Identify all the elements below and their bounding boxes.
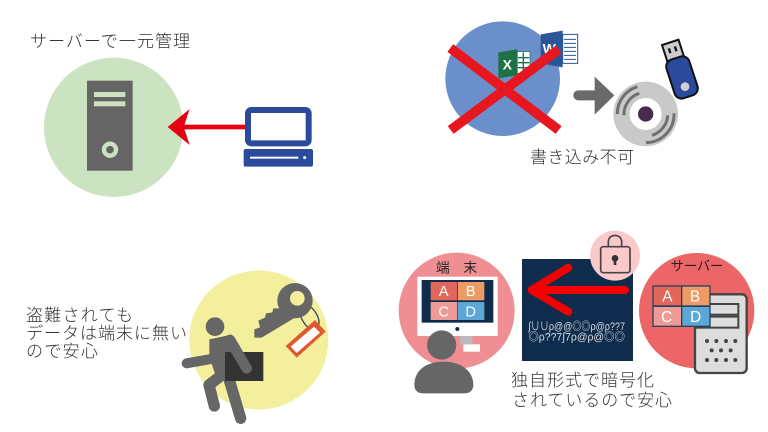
icon: monitor with tiles: B	[466, 284, 476, 300]
encoded text lines: ∫∪∪ρ@@◎◎ρ@ρ??7	[528, 320, 625, 333]
icon: blue circle with office files	[445, 21, 578, 136]
icon: server box	[695, 294, 747, 373]
icon: monitor with tiles: D	[465, 304, 476, 320]
icon: monitor with tiles: C	[438, 304, 449, 320]
text: safe when stolen: データは端末に無い	[26, 324, 187, 343]
panel: server circle	[639, 253, 754, 373]
icon: data tiles: C	[661, 309, 672, 326]
arrow: gray to media	[578, 77, 614, 115]
icon: lock	[590, 231, 640, 281]
icon: laptop	[244, 110, 313, 167]
icon: optical disc	[613, 82, 678, 146]
text: encrypted so safe: されているので安心	[512, 391, 672, 410]
icon: data tiles: D	[690, 309, 701, 326]
heading: server management: サーバーで一元管理	[30, 32, 190, 51]
icon: key with tag	[254, 283, 326, 358]
text: safe when stolen: ので安心	[26, 342, 98, 361]
label: terminal second character: 末	[463, 260, 477, 275]
encoded text lines: ◎ρ??7∫7ρ@ρ@◎◎	[528, 331, 625, 344]
icon: blue circle with office files: X	[503, 56, 513, 72]
icon: monitor with tiles: A	[439, 284, 449, 300]
text: safe when stolen	[26, 306, 187, 361]
icon: running thief with briefcase	[187, 317, 263, 418]
icon: user	[414, 330, 473, 393]
panel: encrypted data block	[522, 259, 633, 361]
icon: server in green circle	[44, 58, 183, 197]
label: terminal: 端	[436, 260, 450, 275]
text: safe when stolen: 盗難されても	[26, 306, 133, 325]
icon: data tiles: A	[662, 289, 673, 306]
icon: USB drive	[659, 39, 700, 101]
panel: terminal circle	[399, 253, 515, 393]
icon: monitor with tiles	[417, 277, 498, 352]
text: encrypted so safe	[511, 371, 672, 410]
icon: red cross	[450, 48, 559, 130]
icon: data tiles	[652, 285, 711, 327]
icon: yellow circle	[189, 270, 328, 410]
icon: data tiles: B	[690, 289, 700, 306]
panel: write prohibited	[445, 21, 700, 167]
label: server: サーバー	[671, 258, 723, 273]
panel: server central management	[30, 32, 313, 197]
panel: encrypted format	[399, 231, 754, 410]
icon: blue circle with office files: W	[543, 40, 557, 56]
label: write prohibited: 書き込み不可	[530, 148, 634, 167]
encoded text lines	[528, 320, 625, 344]
arrow: laptop to server	[168, 109, 248, 145]
panel: safe when stolen	[26, 270, 328, 418]
text: encrypted so safe: 独自形式で暗号化	[511, 371, 654, 390]
arrow: red to terminal	[532, 268, 625, 312]
